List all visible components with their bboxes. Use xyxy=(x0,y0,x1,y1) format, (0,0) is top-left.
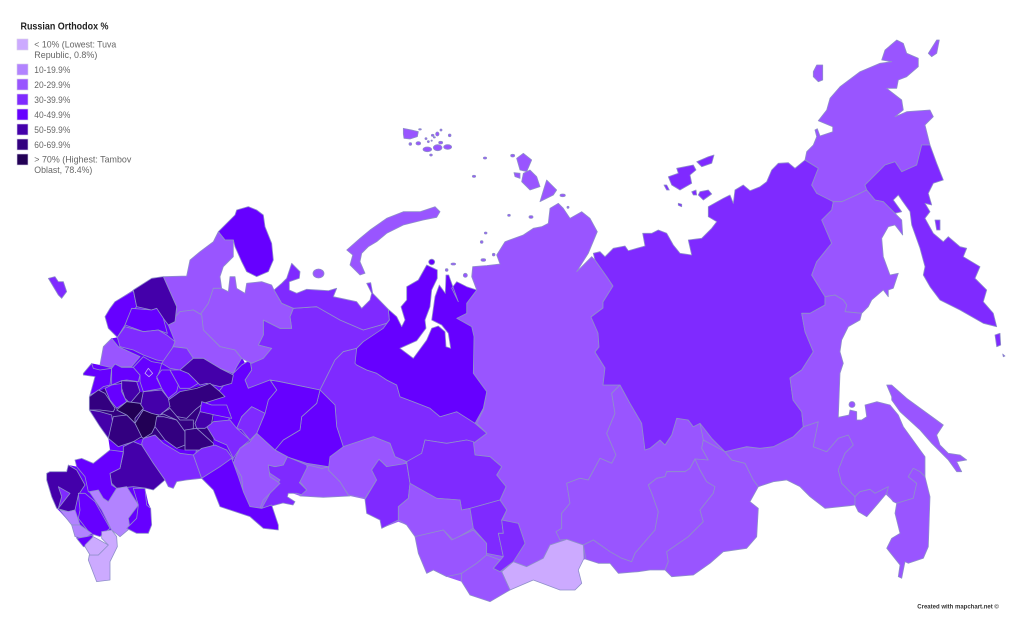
region: Amur Oblast xyxy=(725,422,855,508)
region: Nenets xyxy=(274,263,389,330)
legend item: over 70%: Oblast, 78.4%) xyxy=(34,165,92,176)
region: Kursk Oblast xyxy=(89,390,115,412)
region: Kabardino-Balkaria xyxy=(72,525,92,538)
map underlay: central dark belt xyxy=(89,382,225,450)
map underlay: Asian Russia landmass xyxy=(202,280,893,602)
map: South Russia and Caucasus regions xyxy=(47,435,278,582)
map: European Russia regions xyxy=(48,277,233,450)
region: Chelyabinsk Oblast xyxy=(300,465,350,497)
region: Ivanovo Oblast xyxy=(170,370,198,388)
region: Sakhalin xyxy=(887,385,967,472)
region: Astrakhan strip xyxy=(202,458,278,530)
region: Novgorod Oblast xyxy=(125,308,167,333)
region: Stavropol Krai xyxy=(78,493,110,537)
islands: Severnaya Zemlya xyxy=(445,153,569,277)
legend item: 60-69.9% xyxy=(17,139,71,151)
region: Tatarstan xyxy=(207,420,250,458)
legend item: 50-59.9%: 50-59.9% xyxy=(34,125,71,136)
region: Bryansk Oblast xyxy=(83,363,112,395)
region: Arkhangelsk Oblast xyxy=(200,277,293,363)
region: Magadan Oblast xyxy=(812,190,903,313)
region: Ryazan Oblast xyxy=(140,390,170,415)
region: Lipetsk Oblast xyxy=(117,402,143,423)
region: Rostov Oblast xyxy=(110,442,165,490)
legend item: under 10%: Republic, 0.8%) xyxy=(34,50,97,61)
island: Kolguyev xyxy=(313,269,324,278)
region: Tomsk Oblast xyxy=(407,440,506,510)
region: Tver Oblast xyxy=(117,327,175,362)
region: Chechnya and Ingushetia xyxy=(85,537,108,555)
region: Bashkortostan north xyxy=(233,433,287,508)
region: Jewish Autonomous Oblast xyxy=(855,487,888,517)
island: Novaya Zemlya xyxy=(347,207,440,275)
region: Zabaykalsky Krai xyxy=(665,440,758,577)
region: Murmansk Oblast xyxy=(218,207,273,277)
region: Altai Krai south xyxy=(415,530,487,577)
map: Urals and West Siberia regions xyxy=(193,263,525,602)
region: Leningrad Oblast xyxy=(133,277,177,325)
region: Belgorod Oblast xyxy=(89,410,113,438)
region: Orel Oblast xyxy=(105,383,127,408)
region: Tyumen Oblast and Khanty-Mansi xyxy=(320,348,487,462)
region: Moscow city xyxy=(145,368,153,377)
region: Kaluga Oblast xyxy=(112,364,140,385)
region: Chukotka xyxy=(805,40,933,202)
region: Sverdlovsk Oblast xyxy=(275,390,343,467)
region: Khakassia xyxy=(493,520,525,572)
region: Smolensk Oblast xyxy=(100,338,140,367)
legend item: 20-29.9%: 20-29.9% xyxy=(34,80,71,91)
region: Pskov Oblast xyxy=(105,291,137,337)
region: Orenburg and Bashkortostan xyxy=(262,457,308,508)
legend item: under 10%: < 10% (Lowest: Tuva xyxy=(34,40,117,50)
region: Kamchatka xyxy=(865,145,997,327)
region: Kostroma Oblast xyxy=(180,358,233,387)
region: Mari El xyxy=(200,402,232,418)
region: Voronezh Oblast xyxy=(108,415,142,447)
region: Udmurtia xyxy=(237,407,265,440)
region: Nizhny Novgorod Oblast xyxy=(160,383,225,418)
region: Buryatia xyxy=(583,459,715,573)
legend item: 60-69.9%: 60-69.9% xyxy=(34,140,71,151)
legend item: under 10% xyxy=(17,39,117,61)
islands: Franz Josef Land xyxy=(403,128,452,156)
region: Samara and Ulyanovsk area xyxy=(193,448,228,475)
region: Dagestan xyxy=(88,530,117,582)
region: Astrakhan Oblast xyxy=(127,488,152,533)
regions: South Siberia xyxy=(300,437,525,602)
credit: Created with mapchart.net © xyxy=(917,604,999,610)
region: Adygea xyxy=(58,487,70,508)
legend item: 30-39.9%: 30-39.9% xyxy=(34,95,71,106)
region: Kaliningrad Oblast xyxy=(48,277,67,298)
region: Yamalo-Nenets xyxy=(355,265,487,423)
region: Tambov Oblast xyxy=(135,410,158,438)
legend item: 10-19.9% xyxy=(17,64,71,76)
map: Siberia and Far East regions xyxy=(457,40,1005,590)
region: Tula Oblast xyxy=(122,381,140,403)
region: Omsk Oblast xyxy=(365,459,410,528)
region: Karelia xyxy=(163,232,233,325)
legend item: 50-59.9% xyxy=(17,124,71,136)
region: Kalmykia xyxy=(89,487,138,537)
region: Perm Krai xyxy=(257,380,320,450)
region: Yaroslavl Oblast xyxy=(162,347,193,370)
region: Kemerovo Oblast xyxy=(470,500,507,557)
islands: Far East xyxy=(813,40,1005,408)
region: Vladimir Oblast xyxy=(157,370,178,398)
region: Komi Republic xyxy=(245,307,387,390)
legend item: 40-49.9% xyxy=(17,109,71,121)
region: Saratov Oblast xyxy=(142,435,202,488)
region: Kirov Oblast xyxy=(203,360,277,428)
legend title: Russian Orthodox % xyxy=(20,22,109,32)
region: Primorsky Krai xyxy=(887,468,930,578)
islands: New Siberian xyxy=(664,155,714,207)
region: North Ossetia xyxy=(77,535,93,547)
region: Krasnodar Krai xyxy=(47,465,85,512)
island: Gydan islet xyxy=(429,259,435,265)
region: Mordovia xyxy=(162,408,193,432)
legend item: over 70% xyxy=(17,154,132,176)
region: Krasnoyarsk Krai xyxy=(457,203,620,567)
region: Tuva Republic xyxy=(502,539,584,590)
region: Chuvashia xyxy=(195,412,213,428)
map: northwest and islands xyxy=(163,128,569,373)
legend item: over 70%: > 70% (Highest: Tambov xyxy=(34,154,132,166)
region: Altai Krai north xyxy=(398,483,473,540)
region: Vologda Oblast xyxy=(167,310,242,373)
legend item: 20-29.9% xyxy=(17,79,71,91)
region: Kurgan Oblast xyxy=(328,437,407,498)
legend xyxy=(17,22,132,176)
legend item: 10-19.9%: 10-19.9% xyxy=(34,65,71,76)
map underlay: European Russia landmass xyxy=(47,277,263,547)
legend item: 30-39.9% xyxy=(17,94,71,106)
region: Volgograd Oblast xyxy=(75,450,123,502)
region: Khabarovsk Krai xyxy=(790,295,925,503)
region: Volga bend xyxy=(193,445,233,478)
region: Ulyanovsk Oblast xyxy=(185,428,213,450)
region: Altai Republic xyxy=(462,555,510,602)
region: Moscow Oblast xyxy=(133,357,162,392)
region: Penza Oblast xyxy=(155,417,185,448)
region: Karachay-Cherkessia xyxy=(60,510,80,525)
region: Irkutsk Oblast xyxy=(556,385,708,562)
region: Yakutia xyxy=(591,160,833,452)
legend item: 40-49.9%: 40-49.9% xyxy=(34,110,71,121)
